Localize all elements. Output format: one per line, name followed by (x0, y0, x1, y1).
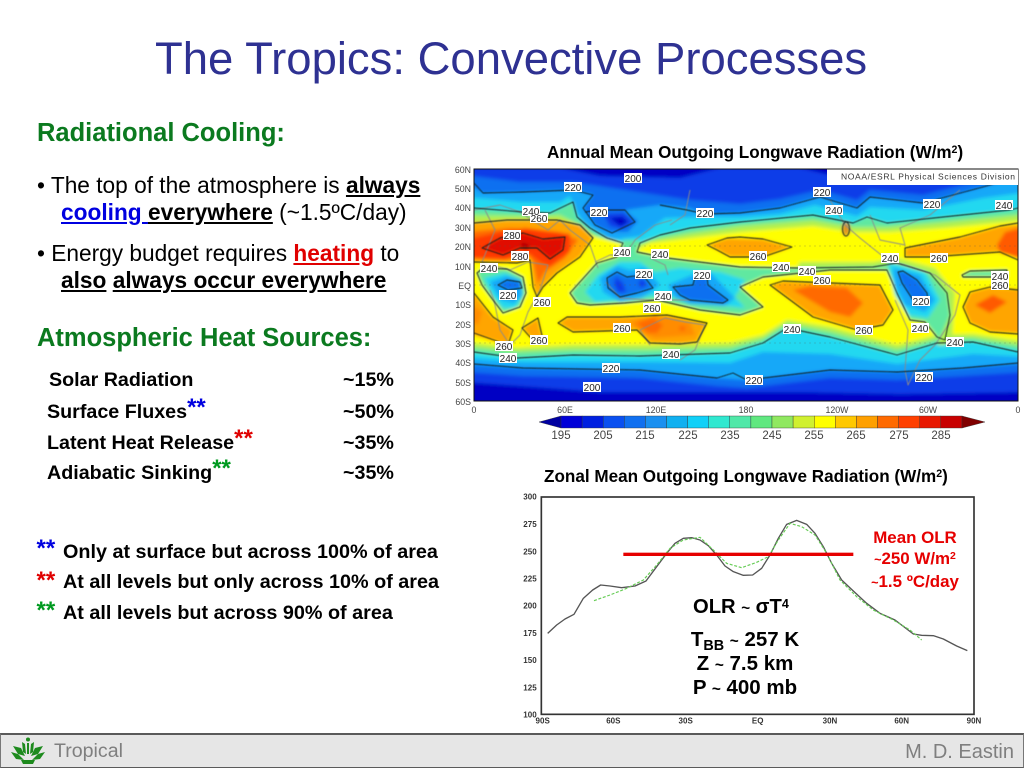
legend: asterisk notes: ** (36, 535, 55, 562)
contour labels: 260 (614, 324, 631, 335)
contour labels: 220 (591, 208, 608, 219)
contour labels: 260 (931, 254, 948, 265)
data source note (827, 170, 1018, 185)
map latitude axis: 30N (455, 223, 471, 233)
text block: cooling bullet: • The top of the atmosphere is always (37, 172, 420, 198)
text block: heating bullet: also always occur everywhere (61, 267, 386, 293)
callout: mean OLR (871, 528, 959, 590)
y axis labels: 200 (523, 602, 537, 611)
chart: zonal mean OLR (523, 493, 982, 726)
contour labels: 220 (636, 270, 653, 281)
contour labels: 260 (856, 326, 873, 337)
callout: mean OLR: ~250 W/m2 (874, 548, 956, 568)
map latitude axis: 40S (455, 358, 471, 368)
contour labels: 220 (565, 183, 582, 194)
map latitude axis: 20N (455, 242, 471, 252)
y axis labels: 100 (523, 710, 537, 719)
callout: Stefan-Boltzmann relation: OLR ~ σT4 (693, 596, 789, 618)
x axis labels: 30N (823, 717, 838, 726)
y axis labels: 300 (523, 493, 537, 502)
map latitude axis: 10N (455, 262, 471, 272)
contour labels: 220 (814, 188, 831, 199)
x axis labels: 60N (894, 717, 909, 726)
map longitude axis: 60E (557, 405, 573, 415)
contour labels: 220 (916, 373, 933, 384)
contour labels: 260 (644, 304, 661, 315)
text block: cooling bullet (37, 172, 420, 225)
contour labels: 240 (652, 250, 669, 261)
x axis labels: 90N (967, 717, 982, 726)
table: heat sources: Solar Radiation (49, 369, 193, 391)
y axis labels: 125 (523, 683, 537, 692)
table: heat sources (47, 369, 394, 484)
map latitude axis: 40N (455, 203, 471, 213)
map longitude axis: 180 (739, 405, 753, 415)
panel: text column (36, 118, 440, 624)
table: heat sources: ~35% (343, 462, 394, 484)
colour bar labels: 275 (889, 430, 909, 442)
legend: asterisk notes: At all levels but across 90% of area (63, 602, 393, 624)
contour labels: 240 (481, 264, 498, 275)
map latitude axis (455, 165, 471, 407)
legend: asterisk notes (36, 535, 440, 624)
colour bar labels: 285 (931, 430, 951, 442)
map longitude axis: 120E (646, 405, 666, 415)
contour labels: 280 (512, 252, 529, 263)
text block: heating bullet: • Energy budget requires heating to (37, 240, 399, 266)
table: heat sources: Latent Heat Release** (47, 425, 253, 454)
table: heat sources: ~35% (343, 432, 394, 454)
heading: annual mean map: Annual Mean Outgoing Longwave Radiation (W/m2) (547, 142, 963, 162)
contour labels (480, 173, 1013, 394)
colour bar labels: 195 (551, 430, 571, 442)
contour labels: 260 (534, 298, 551, 309)
colour bar labels: 235 (720, 430, 740, 442)
contour labels: 200 (584, 383, 601, 394)
contour labels: 240 (784, 325, 801, 336)
contour labels: 240 (655, 292, 672, 303)
table: heat sources: ~50% (343, 401, 394, 423)
colour bar labels: 245 (762, 430, 782, 442)
contour labels: 220 (500, 291, 517, 302)
contour labels: 220 (694, 271, 711, 282)
contour labels: 220 (603, 364, 620, 375)
colour bar (539, 416, 985, 428)
contour labels: 240 (614, 248, 631, 259)
footer text: left: Tropical (54, 740, 123, 762)
contour labels: 260 (496, 342, 513, 353)
map frame (474, 169, 1018, 401)
callout: mean OLR: Mean OLR (873, 528, 957, 546)
map latitude axis: 20S (455, 320, 471, 330)
contour labels: 240 (773, 263, 790, 274)
map longitude axis: 120W (826, 405, 849, 415)
y axis labels: 150 (523, 656, 537, 665)
decorative contours (474, 177, 1018, 380)
map latitude axis: 60N (455, 165, 471, 175)
y axis labels (523, 493, 537, 719)
y axis labels: 250 (523, 547, 537, 556)
footer bar (0, 733, 1024, 768)
contour labels: 240 (947, 338, 964, 349)
map longitude axis (472, 405, 1021, 415)
heading: atmospheric heat sources: Atmospheric Heat Sources: (37, 324, 371, 352)
contour labels: 280 (504, 231, 521, 242)
contour labels: 220 (913, 297, 930, 308)
contour labels: 240 (882, 254, 899, 265)
x axis labels: EQ (752, 717, 763, 726)
colour bar labels (551, 430, 951, 442)
heading: zonal mean chart: Zonal Mean Outgoing Longwave Radiation (W/m2) (544, 466, 948, 486)
callout: emission values (691, 628, 799, 698)
contour labels: 220 (697, 209, 714, 220)
heading: radiational cooling: Radiational Cooling: (37, 118, 285, 146)
colour bar labels: 255 (804, 430, 824, 442)
decorative gridlines (474, 246, 1018, 343)
map latitude axis: 50N (455, 184, 471, 194)
contour labels: 240 (912, 324, 929, 335)
text block: cooling bullet: cooling everywhere (~1.5ºC/day) (61, 199, 407, 225)
contour labels: 240 (992, 272, 1009, 283)
contour labels: 240 (826, 206, 843, 217)
contour labels: 260 (531, 214, 548, 225)
legend: asterisk notes: ** (36, 567, 55, 594)
callout: emission values: Z ~ 7.5 km (697, 652, 793, 675)
legend: asterisk notes: ** (36, 597, 55, 624)
chart axes (541, 497, 974, 714)
comparison dashed line (594, 523, 922, 640)
map latitude axis: 50S (455, 378, 471, 388)
map longitude axis: 0 (1016, 405, 1021, 415)
map latitude axis: 60S (455, 397, 471, 407)
map longitude axis: 60W (919, 405, 938, 415)
footer text: right: M. D. Eastin (905, 741, 1014, 763)
legend: asterisk notes: Only at surface but across 100% of area (63, 540, 438, 562)
contour labels: 260 (814, 276, 831, 287)
contour labels: 240 (500, 354, 517, 365)
mean OLR line (623, 553, 853, 556)
contour labels: 240 (799, 267, 816, 278)
data source note: NOAA/ESRL Physical Sciences Division (841, 172, 1015, 182)
observed OLR line (548, 520, 967, 651)
contour labels: 220 (746, 376, 763, 387)
map latitude axis: 10S (455, 300, 471, 310)
colour bar labels: 205 (593, 430, 613, 442)
title: The Tropics: Convective Processes (155, 33, 867, 84)
map latitude axis: 30S (455, 339, 471, 349)
y axis labels: 275 (523, 520, 537, 529)
callout: mean OLR: ~1.5 ºC/day (871, 572, 959, 590)
x axis labels: 30S (679, 717, 693, 726)
colour bar labels: 215 (635, 430, 655, 442)
contour labels: 260 (992, 281, 1009, 292)
chart: annual mean OLR map (455, 165, 1021, 442)
x axis labels: 90S (536, 717, 550, 726)
contour labels: 260 (531, 336, 548, 347)
contour labels: 240 (663, 350, 680, 361)
contour labels: 220 (924, 200, 941, 211)
contour labels: 240 (996, 201, 1013, 212)
callout: emission values: TBB ~ 257 K (691, 628, 799, 654)
y axis labels: 225 (523, 575, 537, 584)
colour bar labels: 225 (678, 430, 698, 442)
contour labels: 260 (750, 252, 767, 263)
callout: emission values: P ~ 400 mb (693, 676, 797, 698)
legend: asterisk notes: At all levels but only across 10% of area (63, 571, 439, 593)
table: heat sources: Adiabatic Sinking** (47, 455, 231, 484)
table: heat sources: ~15% (343, 369, 394, 391)
table: heat sources: Surface Fluxes** (47, 394, 206, 423)
map latitude axis: EQ (458, 281, 471, 291)
y axis labels: 175 (523, 629, 537, 638)
icon: green lotus logo (11, 738, 45, 764)
contour labels: 200 (625, 174, 642, 185)
colour bar labels: 265 (846, 430, 866, 442)
x axis labels: 60S (606, 717, 621, 726)
map longitude axis: 0 (472, 405, 477, 415)
decorative coastlines (474, 190, 960, 385)
x axis labels (536, 717, 982, 726)
text block: heating bullet (37, 240, 399, 293)
contour labels: 240 (523, 207, 540, 218)
